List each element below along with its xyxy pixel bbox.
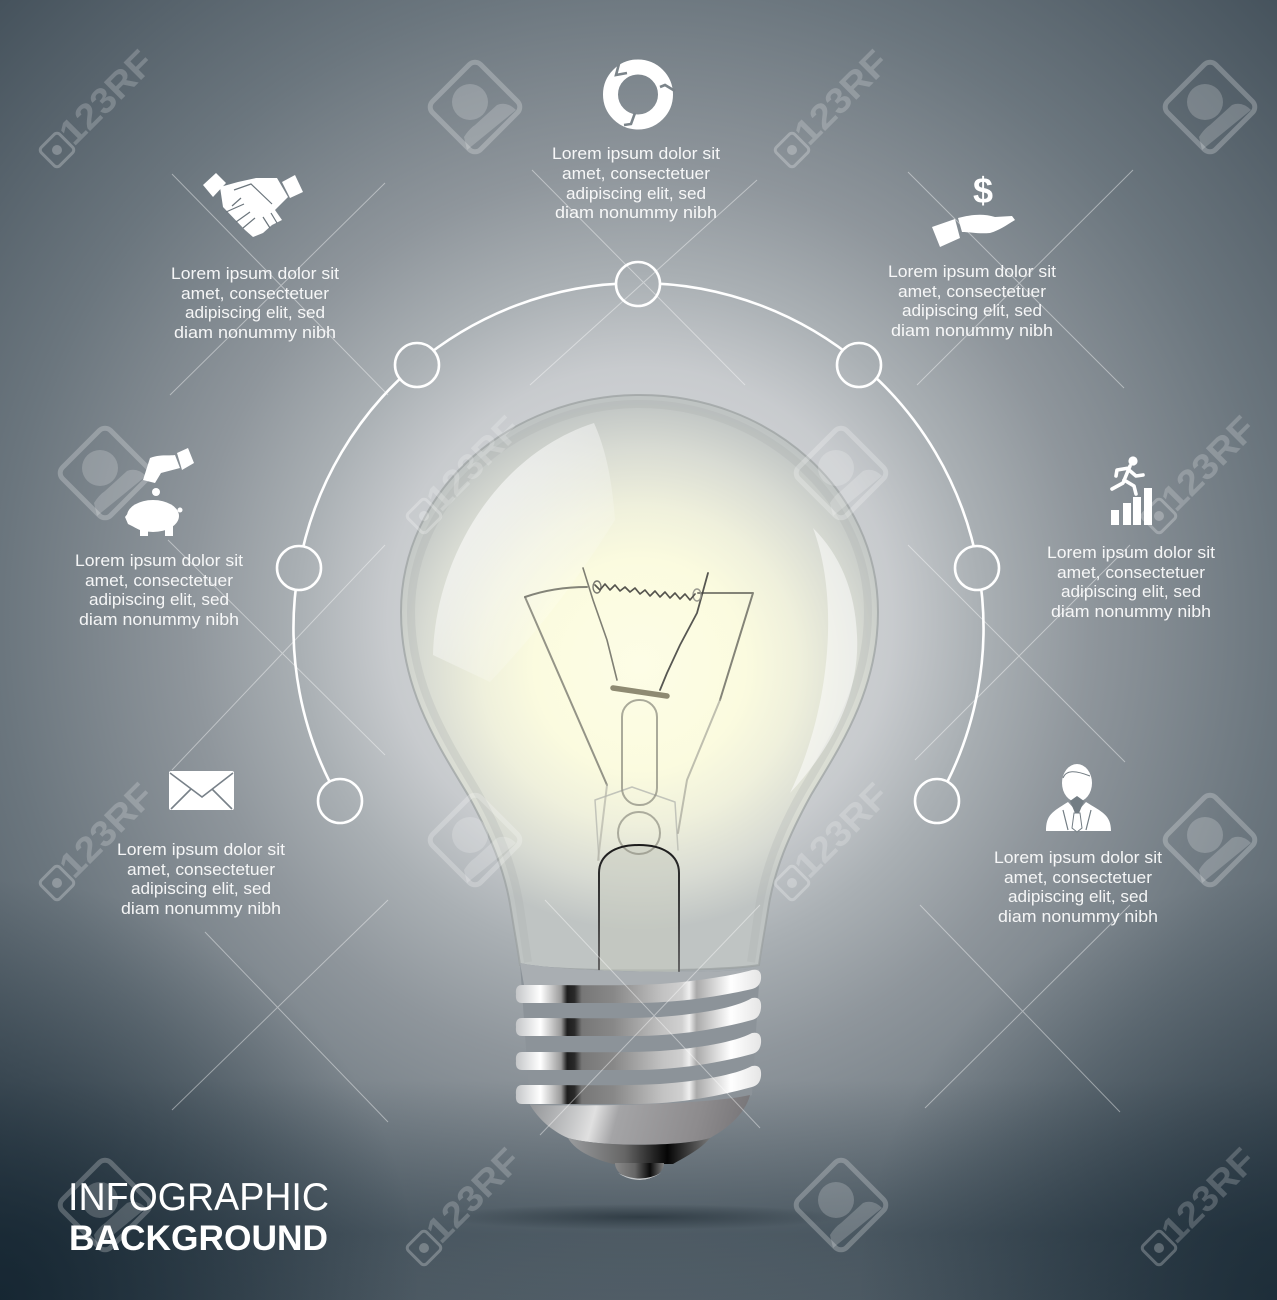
thread 4 <box>516 1066 761 1104</box>
thread 3 <box>516 1033 761 1070</box>
text block: upper left: diam nonummy nibh <box>174 324 336 342</box>
text block: upper right: diam nonummy nibh <box>891 322 1053 340</box>
text block: middle left: amet, consectetuer <box>85 572 234 590</box>
watermark logos: 123RF <box>1153 408 1264 519</box>
text block: middle left: adipiscing elit, sed <box>89 591 229 609</box>
text block: lower left <box>117 841 285 918</box>
icon: businessman <box>1046 764 1111 832</box>
icon: envelope <box>169 771 234 810</box>
text block: lower left: amet, consectetuer <box>127 861 276 879</box>
icon: piggy bank <box>125 448 194 536</box>
text block: lower right: adipiscing elit, sed <box>1008 888 1148 906</box>
icon: runner on bars <box>1111 456 1152 525</box>
text block: upper left: amet, consectetuer <box>181 285 330 303</box>
text block: middle right: adipiscing elit, sed <box>1061 583 1201 601</box>
glass highlight left <box>433 423 615 682</box>
text block: upper left <box>171 265 339 342</box>
text block: lower right: diam nonummy nibh <box>998 908 1158 926</box>
text block: middle right: diam nonummy nibh <box>1051 603 1211 621</box>
text block: lower left: adipiscing elit, sed <box>131 880 271 898</box>
text block: middle right: amet, consectetuer <box>1057 564 1206 582</box>
text block: lower right: Lorem ipsum dolor sit <box>994 849 1162 867</box>
watermark logos: 123RF <box>1153 1140 1264 1251</box>
text block: middle left: Lorem ipsum dolor sit <box>75 552 243 570</box>
title: BACKGROUND <box>69 1219 328 1258</box>
text block: lower right: amet, consectetuer <box>1004 869 1153 887</box>
text block: lower right <box>994 849 1162 926</box>
text block: middle right: Lorem ipsum dolor sit <box>1047 544 1215 562</box>
text block: top: adipiscing elit, sed <box>566 185 706 203</box>
text block: upper right <box>888 263 1056 340</box>
thread 1 <box>516 970 761 1003</box>
glass highlight right <box>790 528 857 793</box>
icon: handshake <box>203 173 303 237</box>
contact tip <box>615 1163 664 1180</box>
text block: top <box>552 145 720 222</box>
title: INFOGRAPHIC <box>68 1176 329 1219</box>
filament assembly <box>525 568 753 972</box>
text block: lower left: diam nonummy nibh <box>121 900 281 918</box>
text block: top: diam nonummy nibh <box>555 204 717 222</box>
screw base <box>516 963 761 1180</box>
glass envelope <box>401 395 878 970</box>
base cone <box>530 1095 750 1145</box>
watermark logos: 123RF <box>786 42 897 153</box>
watermark logos: 123RF <box>51 775 162 886</box>
text block: upper right: Lorem ipsum dolor sit <box>888 263 1056 281</box>
icon: hand with dollar: $ <box>973 170 993 211</box>
watermark logos: 123RF <box>418 1140 529 1251</box>
text block: upper left: adipiscing elit, sed <box>185 304 325 322</box>
text block: top: amet, consectetuer <box>562 165 711 183</box>
text block: middle right <box>1047 544 1215 621</box>
text block: upper left: Lorem ipsum dolor sit <box>171 265 339 283</box>
icon: circular arrows <box>610 60 675 125</box>
icon: hand with dollar <box>932 170 1015 247</box>
contact cap <box>568 1138 710 1164</box>
text block: lower left: Lorem ipsum dolor sit <box>117 841 285 859</box>
light bulb <box>401 395 878 1180</box>
text block: top: Lorem ipsum dolor sit <box>552 145 720 163</box>
thin diagonal crossing lines <box>168 170 1133 1135</box>
watermark logos: 123RF <box>51 42 162 153</box>
text block: upper right: amet, consectetuer <box>898 283 1047 301</box>
watermark logos: 123RF <box>418 408 529 519</box>
arc with connector nodes <box>277 262 999 823</box>
text block: upper right: adipiscing elit, sed <box>902 302 1042 320</box>
text block: middle left <box>75 552 243 629</box>
thread 2 <box>516 998 761 1036</box>
text block: middle left: diam nonummy nibh <box>79 611 239 629</box>
watermark logos: 123RF <box>786 775 897 886</box>
title <box>68 1176 329 1258</box>
